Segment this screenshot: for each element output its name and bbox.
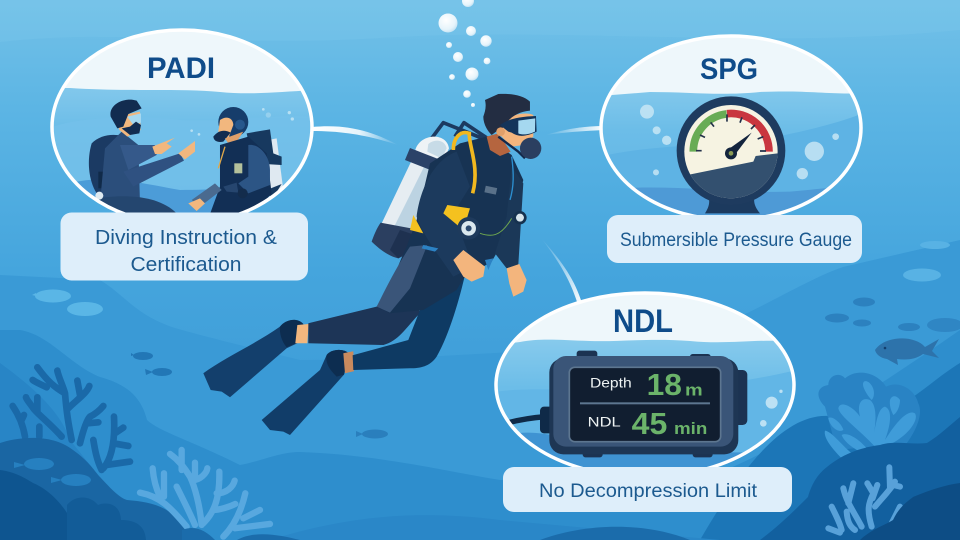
bubbles rising from diver	[438, 0, 492, 107]
connector: NDL to diver	[541, 238, 582, 305]
dive computer readout: m	[685, 380, 703, 399]
panel: PADI	[50, 28, 315, 280]
PADI caption box: Certification	[130, 254, 242, 276]
PADI instructor figure	[89, 100, 195, 214]
NDL circle outline	[496, 293, 794, 477]
dive computer readout: 18	[647, 368, 682, 402]
panel: NDL	[495, 290, 797, 512]
dive computer readout: 45	[632, 407, 667, 441]
PADI heading: PADI	[147, 52, 215, 85]
connector: SPG to diver	[546, 126, 604, 135]
diver: head with mask and regulator	[483, 94, 541, 159]
dive computer	[503, 351, 747, 457]
diver: torso and wetsuit	[377, 133, 527, 313]
SPG circle scene	[602, 38, 858, 215]
SPG circle outline	[601, 36, 861, 220]
NDL caption box	[503, 467, 792, 512]
PADI caption box: Diving Instruction &	[95, 227, 278, 249]
diver: front leg	[262, 275, 465, 435]
SPG bubbles	[640, 105, 839, 179]
reef mounds left	[0, 438, 213, 540]
NDL caption box: No Decompression Limit	[539, 480, 758, 502]
diver: back straps	[432, 123, 490, 140]
diver: back leg	[203, 293, 420, 397]
dive computer readout: Depth	[590, 375, 632, 391]
NDL circle scene	[498, 294, 792, 458]
dive computer readout: min	[674, 419, 707, 438]
PADI circle scene	[54, 32, 310, 212]
PADI caption box	[60, 212, 308, 280]
diver: air tank	[372, 137, 449, 258]
reef mounds centre and right	[182, 373, 960, 540]
NDL heading: NDL	[613, 303, 673, 339]
pressure gauge	[677, 96, 785, 213]
SPG caption box: Submersible Pressure Gauge	[620, 230, 852, 251]
coral: light right	[828, 467, 913, 533]
coral: soft blue right	[818, 373, 920, 458]
diver	[203, 94, 541, 435]
PADI circle outline	[52, 30, 312, 224]
SPG heading: SPG	[700, 53, 758, 86]
PADI student figure	[188, 107, 283, 214]
connector: PADI to diver	[312, 126, 398, 145]
dive computer readout	[588, 374, 706, 434]
SPG caption box	[607, 215, 862, 263]
panel: SPG	[600, 30, 865, 263]
NDL bubbles	[760, 390, 783, 427]
background fish group	[32, 241, 960, 438]
coral: dark left	[13, 367, 130, 470]
diver: hands	[453, 250, 527, 297]
coral: light centre-left	[140, 450, 270, 537]
dive computer readout: NDL	[588, 414, 621, 430]
